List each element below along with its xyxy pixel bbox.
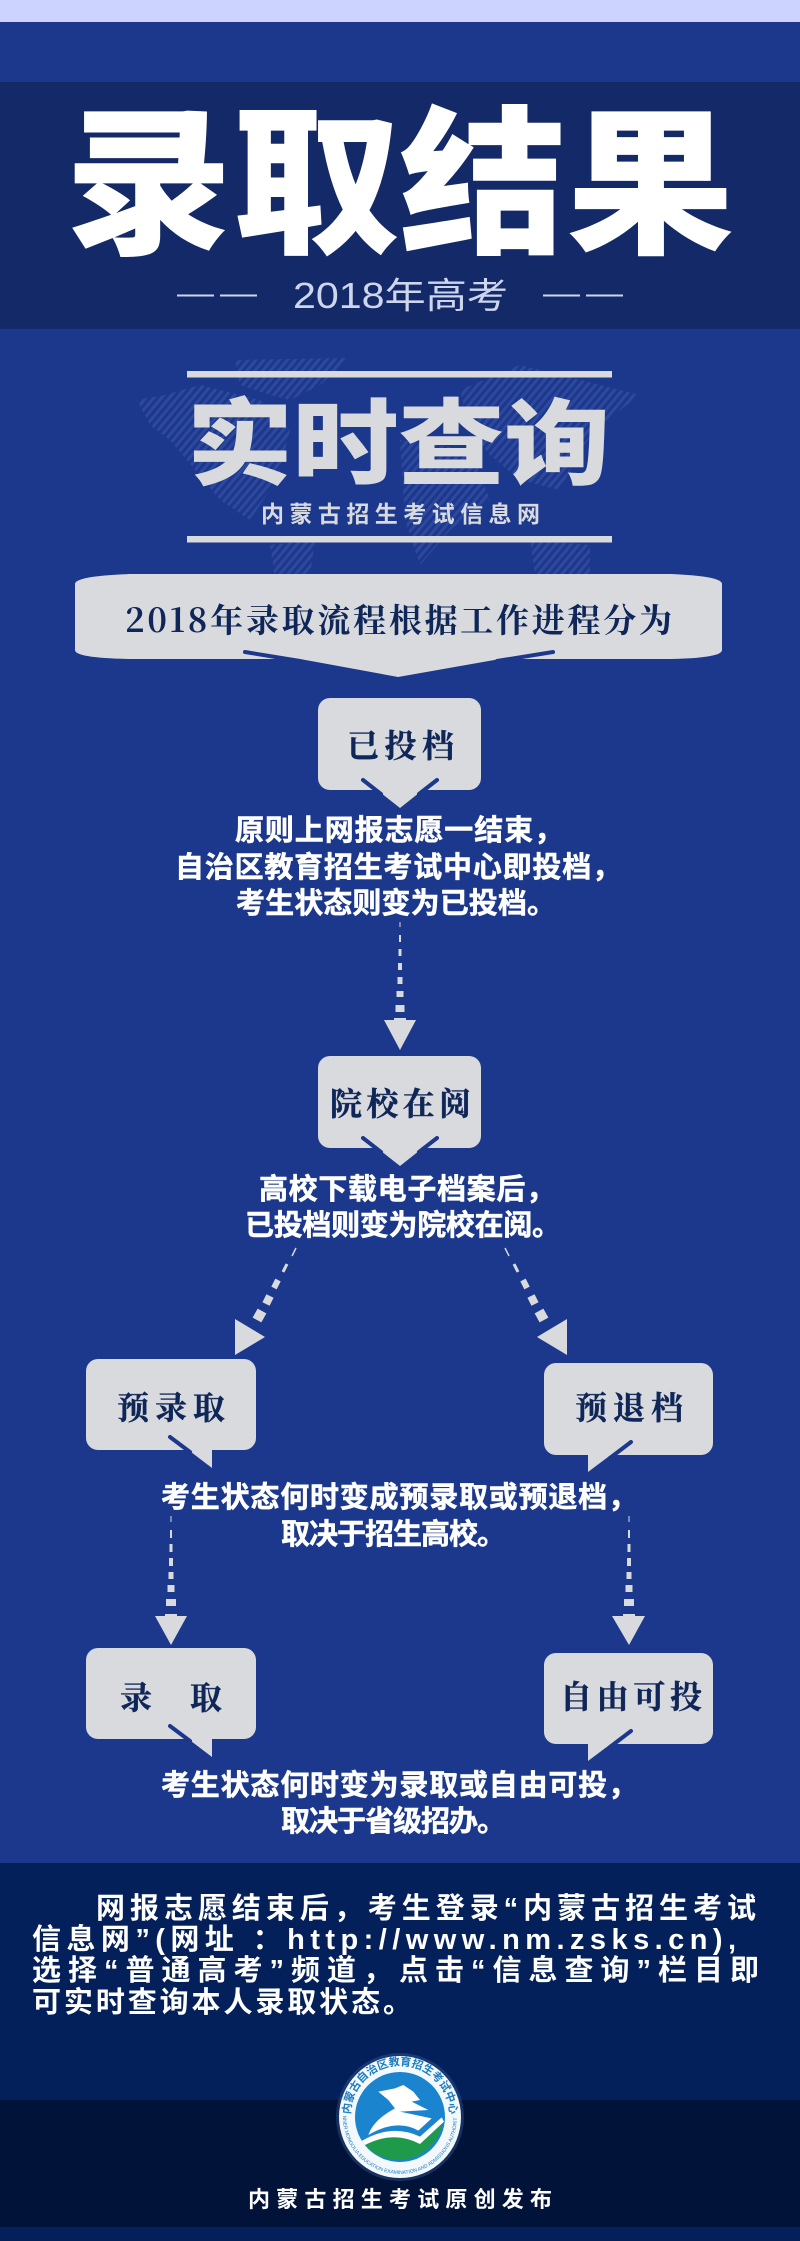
bubble: admitted: 录 取 [120,1673,222,1719]
heading: real-time query: 实时查询 [187,369,610,505]
text: step three: 考生状态何时变成预录取或预退档， [161,1481,637,1514]
header band [0,56,800,329]
text: step four [161,1769,637,1838]
text: step two: 高校下载电子档案后， [259,1173,555,1206]
icon: exam authority logo [336,2053,464,2181]
text: step one: 考生状态则变为已投档。 [236,887,556,920]
text: step four: 取决于省级招办。 [281,1805,506,1838]
text: step two [245,1173,561,1242]
banner: 2018年录取流程根据工作进程分为 [125,595,672,642]
bubble: free to apply [544,1653,713,1761]
text: step three [161,1481,637,1551]
bubble: pre-admitted: 预录取 [117,1383,225,1429]
publisher line: 内蒙古招生考试原创发布 [248,2182,552,2214]
text: step one: 自治区教育招生考试中心即投档， [175,851,621,884]
bubble: school reviewing: 院校在阅 [330,1079,471,1125]
notice text [32,1892,759,2019]
arrow: to pre-rejected [505,1248,567,1355]
notice text: 信息网”(网址 ：http://www.nm.zsks.cn), [32,1923,736,1956]
notice text: 选择“普通高考”频道，点击“信息查询”栏目即 [32,1954,759,1987]
bubble: admitted [86,1648,256,1757]
text: step four: 考生状态何时变为录取或自由可投， [161,1769,637,1802]
world map backdrop [137,358,640,578]
bubble: free to apply: 自由可投 [560,1672,702,1718]
text: step two: 已投档则变为院校在阅。 [245,1209,561,1242]
bubble: pre-rejected [544,1363,713,1472]
subtitle: 2018年高考 [293,275,508,316]
arrow: to pre-admitted [235,1248,296,1355]
sub-heading: site name: 内蒙古招生考试信息网 [261,495,540,529]
arrow: to admitted [155,1516,187,1645]
top light strip [0,0,800,22]
text: step one [175,814,621,920]
bubble: pre-rejected: 预退档 [575,1383,683,1429]
bubble: submitted: 已投档 [347,721,454,767]
arrow: to free to apply [612,1516,645,1645]
text: step three: 取决于招生高校。 [281,1518,506,1551]
notice text: 网报志愿结束后，考生登录“内蒙古招生考试 [96,1892,756,1925]
icon: exam authority logo: 内蒙古自治区教育招生考试中心 [342,2056,458,2114]
arrow: submitted to reviewing [384,922,416,1050]
text: step one: 原则上网报志愿一结束， [235,814,563,847]
title: 录取结果 [65,56,734,288]
banner [75,574,722,677]
bubble: pre-admitted [86,1359,256,1468]
query heading block [187,369,612,542]
bubble: submitted [318,698,481,808]
icon: exam authority logo: INNER MONGOLIA EDUCATION EXAMINATION AND ADMISSIONS AUTHORITY [343,2116,457,2174]
notice text: 可实时查询本人录取状态。 [32,1986,412,2019]
bubble: school reviewing [318,1056,481,1166]
